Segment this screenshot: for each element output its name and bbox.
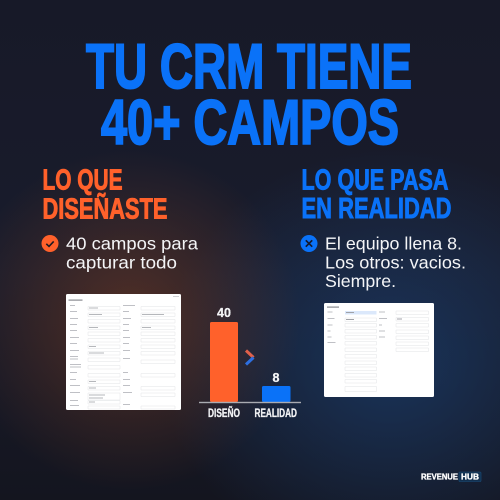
panel: sparse CRM form <box>324 303 434 397</box>
title <box>86 32 412 158</box>
text: reality claim: Siempre. <box>325 271 396 291</box>
label: diseño: DISEÑO <box>208 407 240 420</box>
heading: lo que diseñaste <box>42 164 168 226</box>
heading: lo que pasa en realidad: EN REALIDAD <box>302 193 452 225</box>
text: reality claim: Los otros: vacios. <box>325 252 466 272</box>
bar: realidad <box>262 386 290 402</box>
chart axis <box>199 402 301 403</box>
bar chart <box>199 306 301 420</box>
text: design claim: 40 campos para <box>66 234 198 254</box>
icon: check <box>42 235 58 252</box>
heading: lo que diseñaste: LO QUE <box>42 164 122 196</box>
text: reality claim: El equipo llena 8. <box>325 234 462 254</box>
icon: cross <box>300 235 318 252</box>
panel: full CRM form <box>66 294 181 410</box>
label: realidad: REALIDAD <box>254 408 297 420</box>
value: 40: 40 <box>217 306 231 320</box>
text: reality claim <box>325 234 466 291</box>
value: 8: 8 <box>273 371 280 385</box>
arrow: chevron <box>246 350 254 364</box>
heading: lo que pasa en realidad: LO QUE PASA <box>302 164 449 196</box>
logo: revenue hub: HUB <box>461 472 479 482</box>
logo: revenue hub <box>421 472 481 482</box>
heading: lo que pasa en realidad <box>302 164 452 225</box>
title: 40+ CAMPOS <box>101 88 399 158</box>
logo: revenue hub: REVENUE <box>421 472 458 482</box>
text: design claim <box>66 234 198 272</box>
heading: lo que diseñaste: DISEÑASTE <box>42 192 168 226</box>
text: design claim: capturar todo <box>66 252 177 272</box>
bar: diseño <box>210 322 238 402</box>
